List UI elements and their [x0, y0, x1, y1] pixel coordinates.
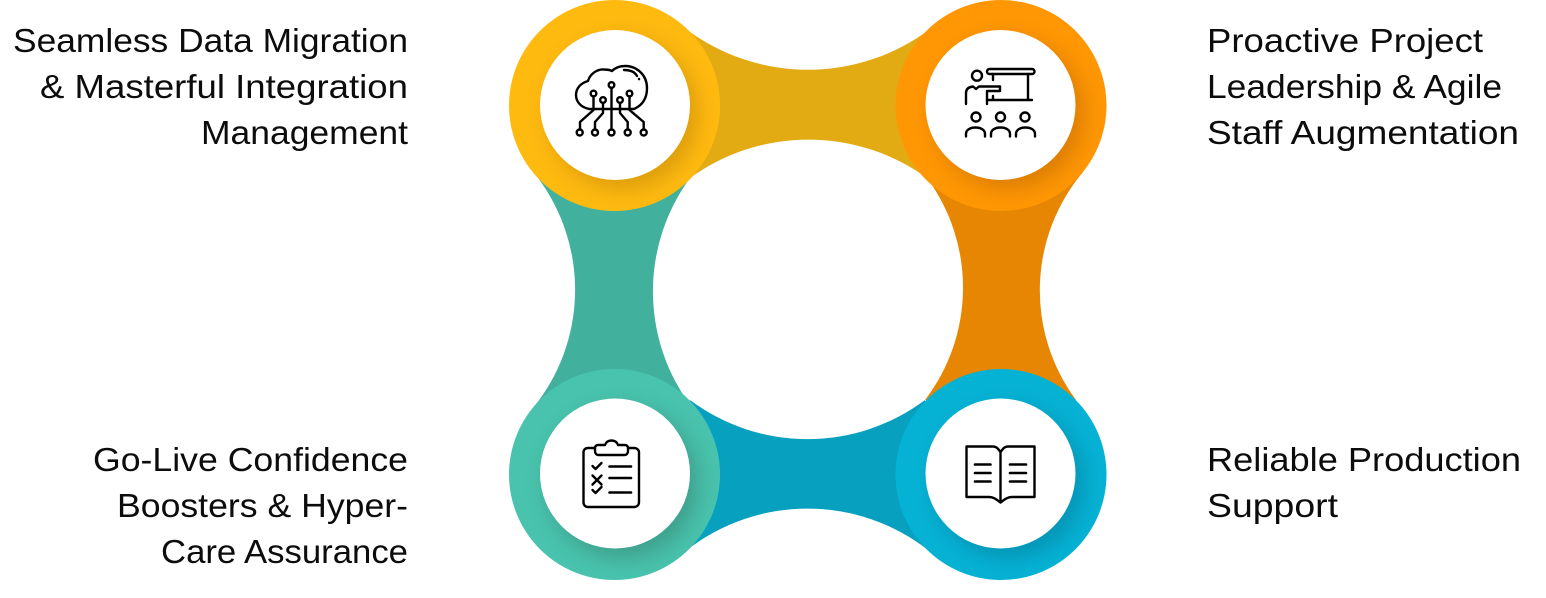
text: go-live label — [93, 442, 408, 571]
icon: presenter and audience — [966, 69, 1035, 136]
text: go-live label: Go-Live Confidence — [93, 442, 408, 479]
node: go-live — [509, 369, 720, 580]
text: go-live label: Care Assurance — [161, 534, 408, 571]
text: data migration label: & Masterful Integration — [40, 69, 408, 106]
text: project leadership label: Staff Augmentation — [1207, 115, 1519, 152]
icon: cloud circuit — [576, 66, 647, 136]
connector: top gold band — [686, 29, 930, 178]
connector: left teal band — [533, 178, 690, 408]
text: data migration label: Seamless Data Migration — [13, 23, 408, 60]
icon: checklist clipboard — [584, 440, 639, 507]
text: production support label: Support — [1207, 488, 1339, 525]
text: data migration label: Management — [201, 115, 409, 152]
icon: open book — [966, 446, 1034, 502]
connector: bottom blue band — [687, 400, 928, 550]
text: production support label: Reliable Production — [1207, 442, 1521, 479]
node: project leadership — [896, 0, 1106, 211]
node: production support — [896, 369, 1106, 580]
text: project leadership label: Leadership & Agile — [1207, 69, 1502, 106]
node: data migration — [509, 0, 720, 211]
text: project leadership label: Proactive Project — [1207, 23, 1484, 60]
text: project leadership label — [1207, 23, 1519, 152]
text: production support label — [1207, 442, 1521, 525]
connector: right orange band — [925, 172, 1083, 400]
text: go-live label: Boosters & Hyper- — [117, 488, 408, 525]
text: data migration label — [13, 23, 409, 152]
